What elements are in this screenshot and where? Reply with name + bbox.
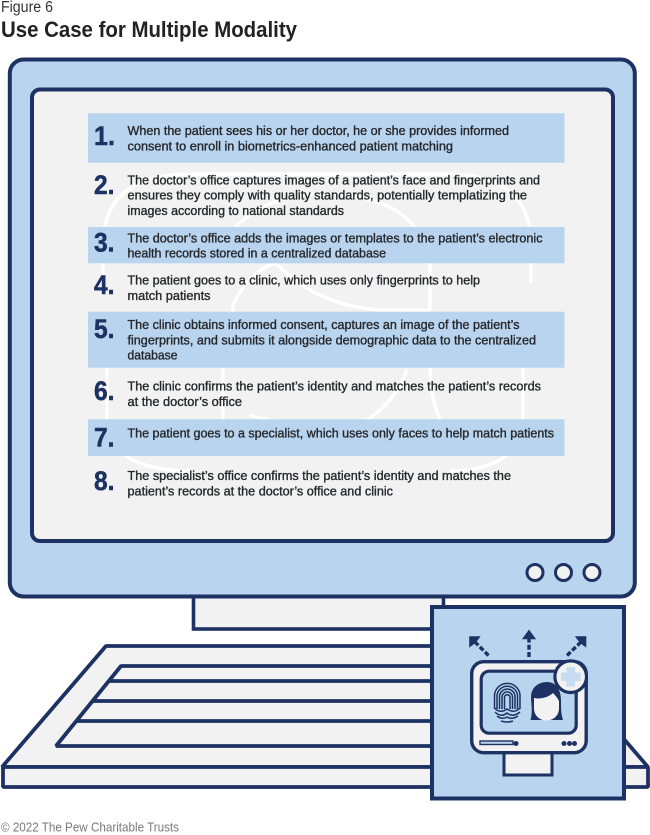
icon: dashed arrow right — [567, 636, 586, 656]
step 3 — [88, 227, 564, 263]
icon: face with hair — [530, 682, 563, 720]
monitor buttons — [527, 564, 600, 580]
icon: small monitor stand — [504, 752, 552, 775]
step 5: database — [128, 348, 178, 363]
step 4: match patients — [128, 288, 211, 303]
icon panel background — [432, 607, 624, 798]
step 1: 1. — [94, 121, 115, 151]
step 6: The clinic confirms the patient’s identity and matches the patient’s records — [128, 379, 541, 394]
step 8: 8. — [94, 466, 114, 496]
icon: dashed arrow left — [470, 636, 488, 656]
icon: medical plus badge — [555, 661, 586, 692]
step 8 — [94, 466, 511, 498]
step 4: The patient goes to a clinic, which uses only fingerprints to help — [128, 273, 480, 288]
step 8: The specialist’s office confirms the patient’s identity and matches the — [128, 468, 511, 483]
step 7: 7. — [94, 423, 114, 453]
title: Use Case for Multiple Modality — [1, 17, 297, 42]
monitor body — [10, 60, 635, 596]
step 3: health records stored in a centralized database — [128, 246, 386, 261]
step 1: When the patient sees his or her doctor, he or she provides informed — [128, 123, 509, 138]
step 5: fingerprints, and submits it alongside demographic data to the centralized — [128, 332, 536, 347]
step 5: The clinic obtains informed consent, captures an image of the patient’s — [128, 317, 520, 332]
step 2: ensures they comply with quality standards, potentially templatizing the — [128, 188, 527, 203]
step 2: The doctor’s office captures images of a patient’s face and fingerprints and — [128, 172, 540, 188]
step 4: 4. — [94, 270, 114, 300]
icon: small monitor body — [472, 662, 586, 753]
screen watermark: face outline — [103, 174, 531, 471]
step 4 — [94, 270, 480, 303]
step 2: 2. — [94, 170, 114, 200]
step 2: images according to national standards — [128, 203, 344, 218]
icon: fingerprint — [494, 683, 520, 722]
icon: monitor control bar — [480, 741, 577, 746]
step 5 — [88, 312, 564, 368]
step 2 — [94, 170, 540, 218]
step 6 — [94, 376, 541, 409]
icon: small monitor screen — [481, 671, 576, 733]
step 7: The patient goes to a specialist, which uses only faces to help match patients — [128, 426, 554, 441]
step 6: at the doctor’s office — [128, 394, 242, 409]
keyboard — [2, 646, 648, 787]
step 5: 5. — [94, 314, 114, 344]
icon: dashed arrow up — [522, 630, 536, 657]
monitor screen — [32, 90, 613, 541]
step 1: consent to enroll in biometrics-enhanced patient matching — [128, 138, 453, 153]
copyright footer: © 2022 The Pew Charitable Trusts — [1, 820, 179, 834]
step 3: 3. — [94, 228, 114, 258]
step 3: The doctor’s office adds the images or templates to the patient’s electronic — [128, 230, 543, 245]
step 7 — [88, 419, 564, 456]
icon panel: biometric monitor — [432, 607, 624, 798]
step 8: patient’s records at the doctor’s office and clinic — [128, 483, 393, 498]
monitor stand — [194, 590, 444, 629]
step 6: 6. — [94, 376, 114, 406]
step 1 — [88, 113, 564, 163]
